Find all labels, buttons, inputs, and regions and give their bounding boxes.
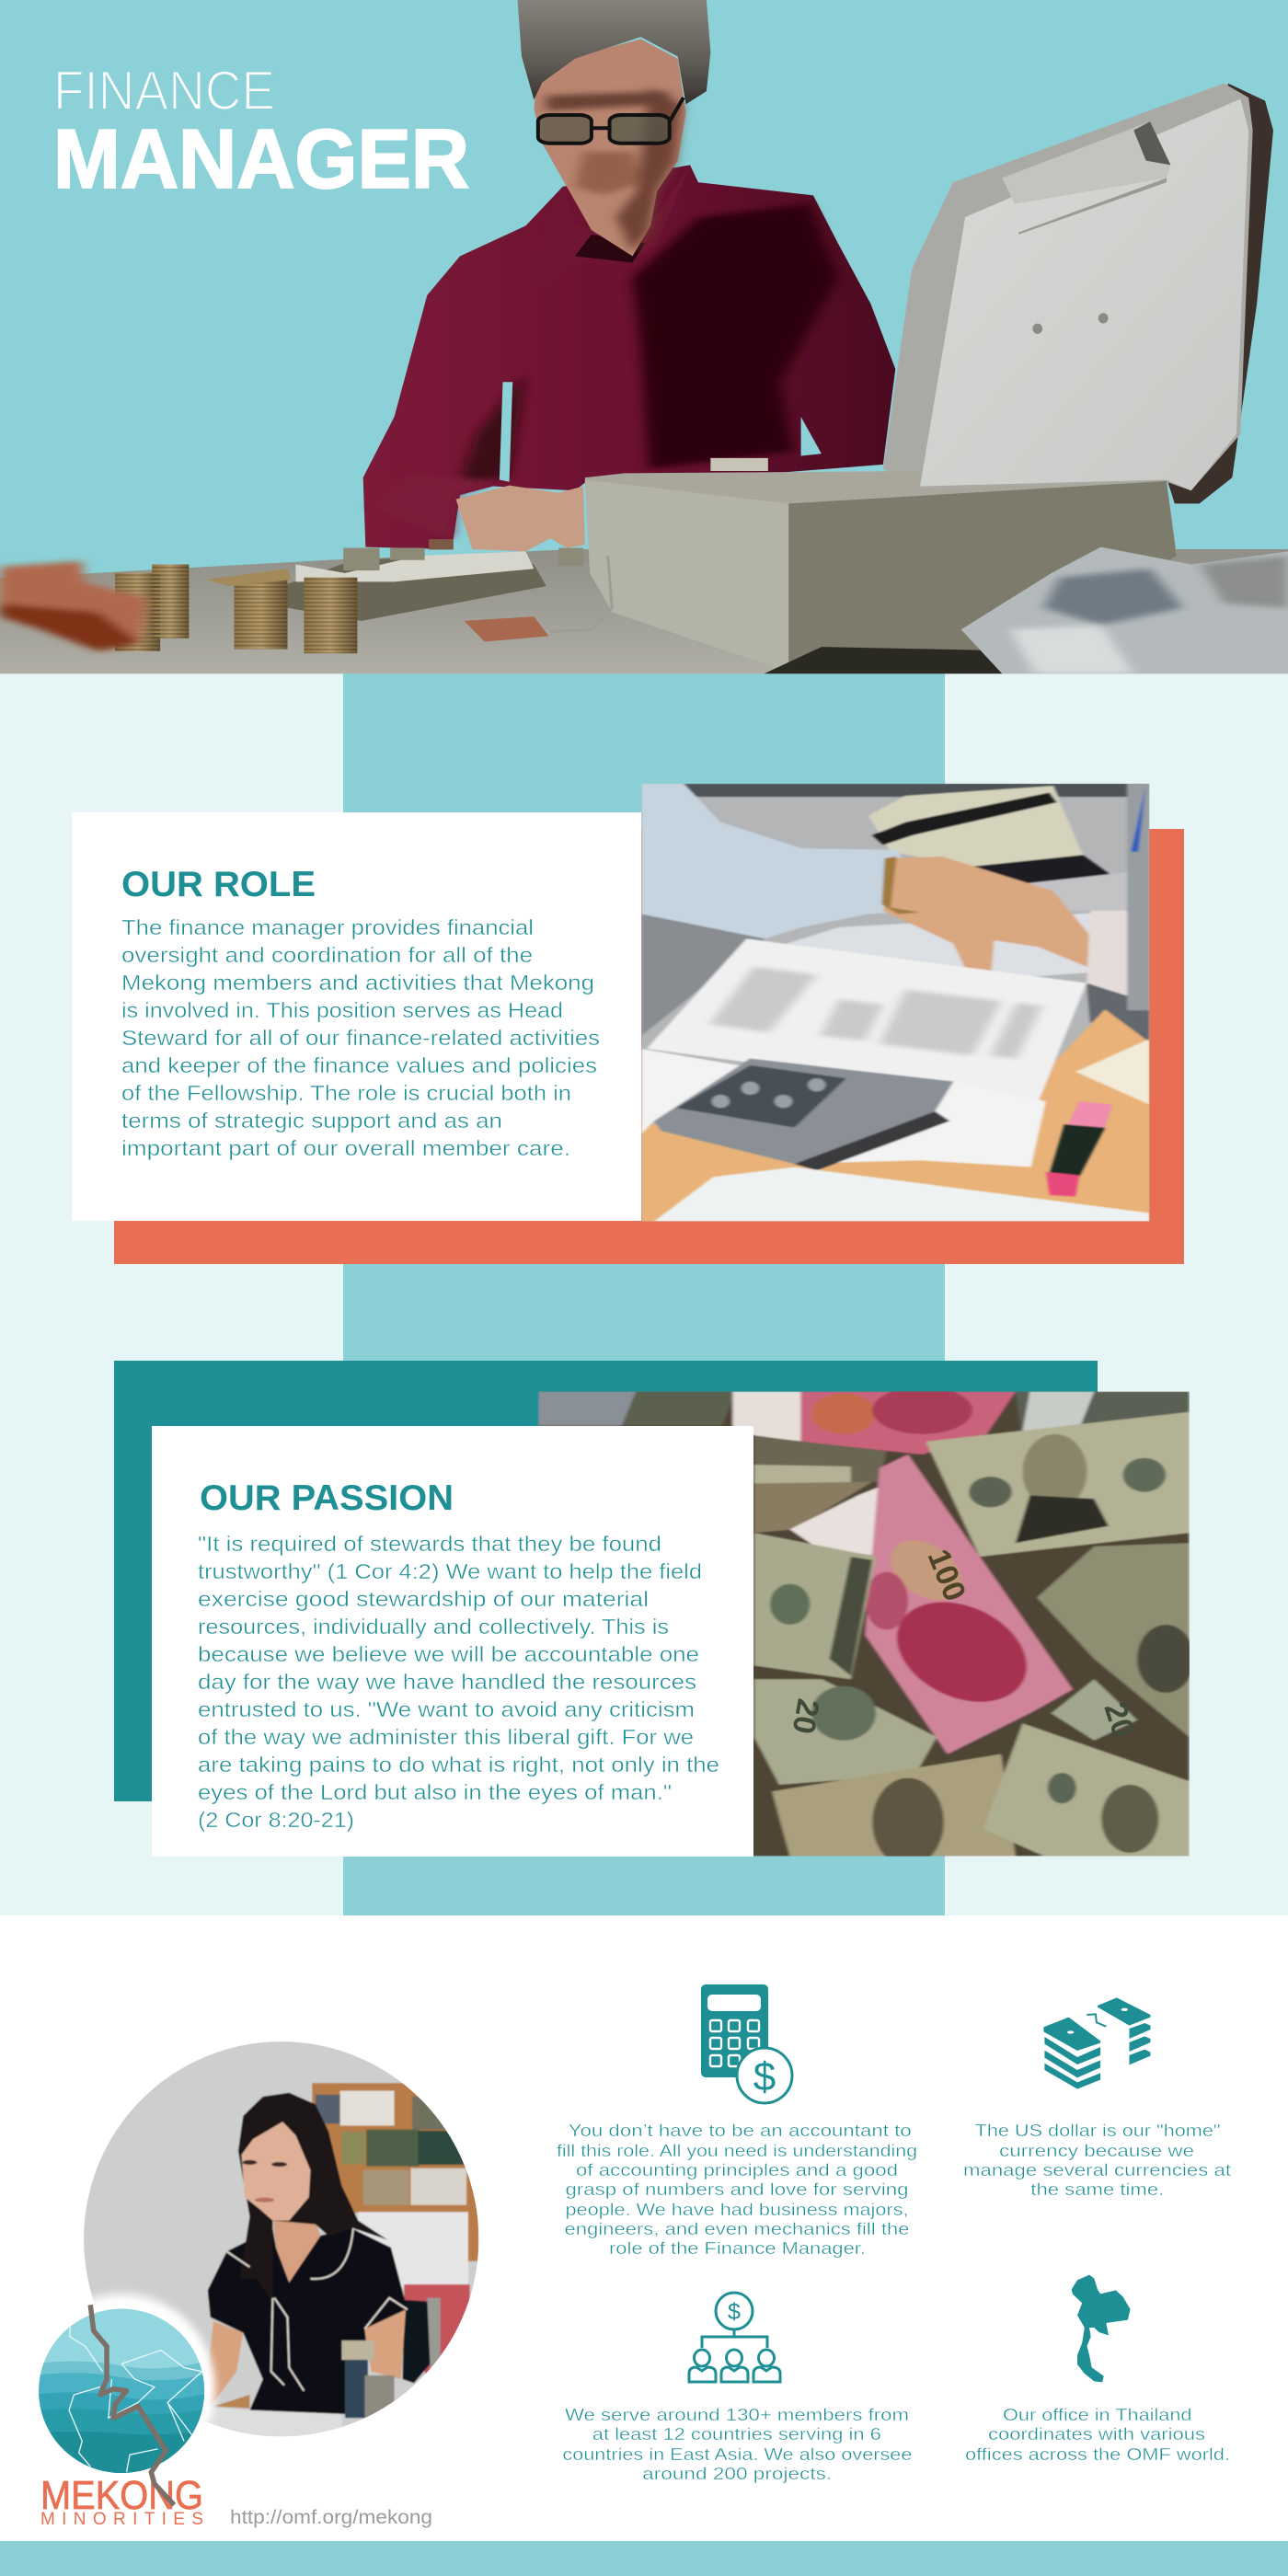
- website link: http://omf.org/mekong: [230, 2507, 432, 2528]
- text block: our role: Mekong members and activities that Mekong: [121, 971, 594, 995]
- text: accountant: people. We have had business majors,: [565, 2200, 909, 2219]
- title: MANAGER: [53, 113, 469, 206]
- text block: our passion: are taking pains to do what is right, not only in the: [198, 1753, 719, 1777]
- text block: our passion: eyes of the Lord but also in the eyes of man.": [198, 1780, 672, 1804]
- text: members: countries in East Asia. We also oversee: [562, 2444, 912, 2464]
- icon: stacks of banknotes: [1043, 1997, 1150, 2089]
- text: accountant: You don’t have to be an accountant to: [569, 2121, 912, 2140]
- logo wordmark: MEKONG: [40, 2473, 203, 2518]
- text: currency: [963, 2121, 1231, 2199]
- text block: our role: oversight and coordination for all of the: [121, 943, 533, 967]
- heading: our passion: OUR PASSION: [200, 1478, 454, 1518]
- icon: calculator with dollar coin: [701, 1984, 792, 2103]
- hero banner: [0, 0, 1288, 673]
- photo: woman at desk in circle: [82, 2039, 479, 2441]
- photo: hand on financial papers with calculator: [641, 784, 1149, 1221]
- logo: Mekong Minorities: MINORITIES: [40, 2510, 203, 2529]
- text block: our passion: day for the way we have handled the resources: [198, 1670, 696, 1694]
- text: Thailand office: coordinates with various: [988, 2424, 1205, 2444]
- text block: our passion: exercise good stewardship of our material: [198, 1587, 649, 1611]
- text: accountant: grasp of numbers and love for serving: [565, 2179, 909, 2199]
- text: Thailand office: [965, 2405, 1230, 2464]
- text block: our role: terms of strategic support and as an: [121, 1109, 502, 1133]
- text: members: at least 12 countries serving in 6: [592, 2424, 881, 2444]
- text: Thailand office: offices across the OMF world.: [965, 2444, 1230, 2464]
- text block: our passion: of the way we administer this liberal gift. For we: [198, 1725, 694, 1749]
- text: accountant: fill this role. All you need is understanding: [557, 2141, 917, 2160]
- text block: our passion: because we believe we will be accountable one: [198, 1642, 699, 1666]
- hero photo: finance manager with cash box: [0, 0, 1288, 673]
- photo: pile of banknotes: 100: [921, 1545, 972, 1606]
- text: currency: currency because we: [999, 2141, 1194, 2160]
- icon: organisation chart with dollar: $: [728, 2299, 741, 2325]
- text: currency: manage several currencies at: [963, 2160, 1231, 2179]
- text: currency: The US dollar is our "home": [975, 2121, 1221, 2140]
- info block: Thailand office: [965, 2275, 1230, 2464]
- text block: our role: is involved in. This position serves as Head: [121, 998, 563, 1022]
- text block: our passion: resources, individually and collectively. This is: [198, 1615, 669, 1639]
- panel: our passion: [114, 1361, 1194, 1867]
- photo: pile of banknotes: 20: [1097, 1698, 1141, 1742]
- text: members: We serve around 130+ members from: [565, 2405, 909, 2424]
- icon: map of Thailand: [1072, 2275, 1131, 2382]
- title: [53, 60, 469, 206]
- photo: pile of banknotes: [538, 1386, 1194, 1867]
- text: accountant: engineers, and even mechanics fill the: [565, 2219, 909, 2238]
- logo globe with river map: [28, 2294, 215, 2484]
- text block: our passion: trustworthy" (1 Cor 4:2) We want to help the field: [198, 1559, 702, 1583]
- info block: members: [562, 2293, 912, 2483]
- text: accountant: [557, 2121, 917, 2258]
- text block: our role: [121, 915, 600, 1160]
- text block: our passion: (2 Cor 8:20-21): [198, 1808, 354, 1832]
- icon: calculator with dollar coin: $: [753, 2054, 776, 2099]
- text block: our passion: "It is required of stewards that they be found: [198, 1532, 661, 1556]
- info block: accountant: [557, 1984, 917, 2258]
- panel: our role: [72, 784, 1184, 1264]
- text: Thailand office: Our office in Thailand: [1003, 2405, 1192, 2424]
- text block: our role: of the Fellowship. The role is crucial both in: [121, 1081, 571, 1105]
- title: FINANCE: [53, 60, 275, 121]
- info block: currency: [963, 1997, 1231, 2199]
- text block: our role: Steward for all of our finance-related activities: [121, 1026, 600, 1050]
- logo: Mekong Minorities: [28, 2294, 215, 2529]
- text block: our passion: [198, 1532, 719, 1832]
- text: accountant: role of the Finance Manager.: [609, 2238, 866, 2258]
- text: accountant: of accounting principles and a good: [576, 2160, 898, 2179]
- text: members: around 200 projects.: [642, 2464, 832, 2483]
- text: currency: the same time.: [1030, 2179, 1164, 2199]
- text: members: [562, 2405, 912, 2483]
- text block: our passion: entrusted to us. "We want to avoid any criticism: [198, 1697, 695, 1721]
- text block: our role: important part of our overall member care.: [121, 1136, 570, 1160]
- heading: our role: OUR ROLE: [121, 865, 316, 904]
- icon: organisation chart with dollar: [689, 2293, 780, 2382]
- logo river line: [90, 2305, 174, 2505]
- text block: our role: and keeper of the finance values and policies: [121, 1053, 597, 1077]
- text block: our role: The finance manager provides financial: [121, 915, 534, 939]
- photo: pile of banknotes: 20: [786, 1696, 826, 1736]
- footer band: [0, 2541, 1288, 2576]
